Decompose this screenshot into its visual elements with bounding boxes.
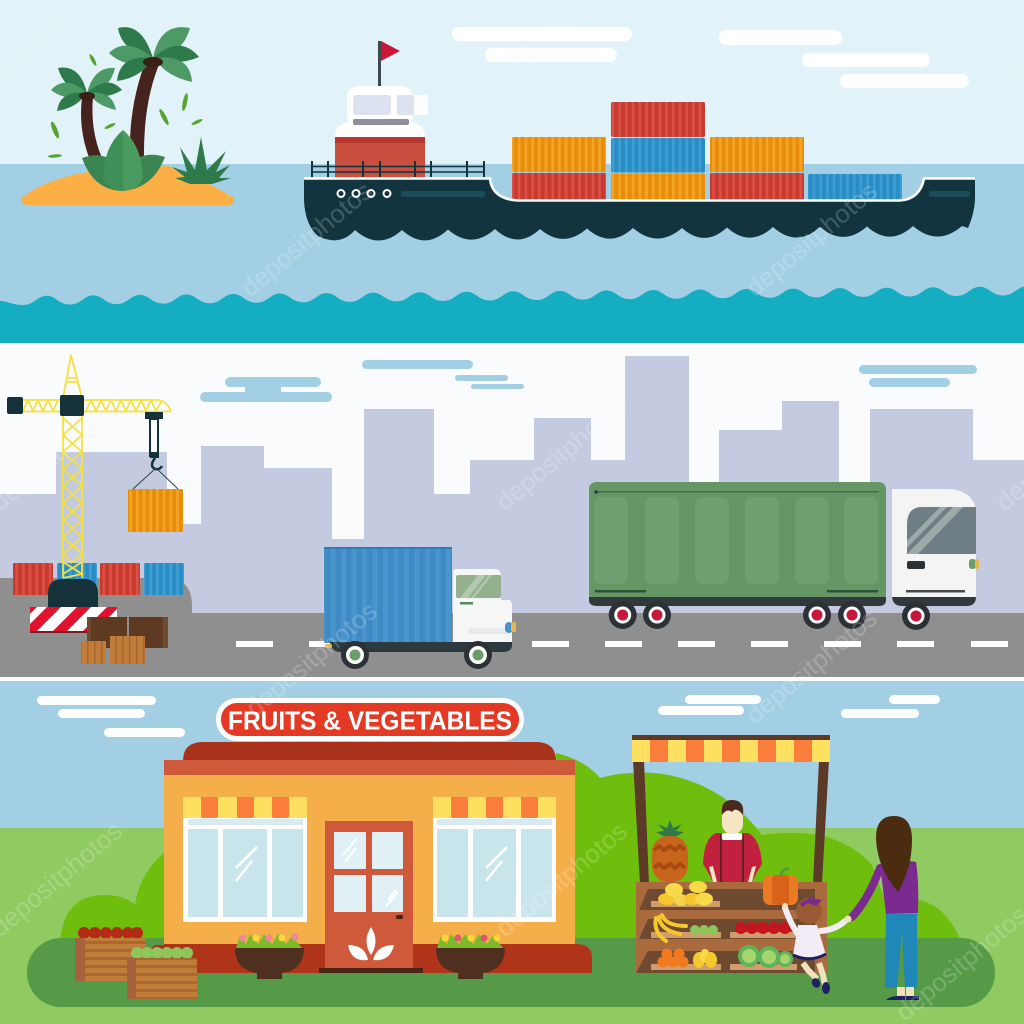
left flower pot [235, 934, 304, 979]
watermark: depositphotos [740, 603, 883, 730]
cab base [892, 597, 976, 606]
oranges [658, 948, 688, 968]
wall [164, 775, 575, 947]
market stall [632, 735, 830, 973]
rear light [325, 644, 332, 648]
barrier [30, 607, 117, 633]
lemons [658, 881, 713, 906]
vendor hands [709, 866, 756, 882]
counter [636, 882, 827, 973]
mast and jib lattice [20, 355, 171, 578]
door handle [460, 602, 473, 604]
arm [852, 868, 880, 917]
blue truck [324, 547, 516, 669]
sign text: FRUITS & VEGETABLES [228, 706, 512, 736]
palm trunks [81, 97, 102, 160]
crane [7, 355, 178, 578]
lamp [969, 559, 979, 569]
skyline [0, 356, 1024, 613]
trailer lines [594, 490, 879, 592]
crane base redraw over containers [63, 562, 82, 578]
red apples [78, 927, 143, 939]
hanging container [128, 489, 183, 532]
girl arms [785, 908, 845, 933]
path [27, 938, 995, 1007]
road [0, 613, 1024, 681]
watermark: depositphotos [490, 816, 633, 943]
girl legs [803, 963, 825, 985]
sand [22, 166, 234, 205]
panel: sea shipping [0, 0, 1024, 343]
right flower pot [436, 934, 505, 979]
cab [60, 395, 84, 416]
small palm fronds [51, 68, 122, 111]
windscreen [907, 507, 976, 554]
watermark: depositphotos [240, 596, 383, 723]
sky [0, 681, 1024, 829]
left window [183, 818, 307, 922]
awning [632, 735, 830, 762]
cargo box [324, 547, 452, 643]
door handle [907, 561, 925, 569]
containers [512, 102, 902, 201]
trailer [589, 482, 886, 602]
hair [876, 816, 912, 892]
green apple crate [127, 958, 197, 999]
deck line [304, 178, 975, 200]
trailer base [589, 597, 886, 606]
pumpkin [763, 868, 798, 905]
headlight [505, 622, 516, 633]
flag [378, 41, 400, 86]
clouds [200, 360, 977, 402]
vendor [703, 800, 762, 882]
cargo ship [304, 41, 975, 240]
crane base [48, 579, 98, 607]
railing [312, 161, 485, 177]
shoes [886, 996, 919, 1000]
roof [183, 742, 556, 761]
crates and boxes [81, 617, 168, 664]
clouds [452, 27, 969, 88]
panel: city logistics [0, 343, 1024, 681]
separator [0, 343, 1024, 346]
girl head [796, 898, 822, 924]
girl [782, 898, 845, 994]
hills [60, 753, 962, 945]
base [164, 944, 592, 973]
cab window [456, 575, 501, 598]
shelves [636, 889, 815, 973]
portholes [338, 190, 390, 197]
red apple crate [75, 938, 146, 981]
bush [82, 130, 165, 191]
pineapple [652, 820, 688, 882]
right window [433, 818, 556, 922]
watermark: depositphotos [235, 176, 378, 303]
torso [880, 860, 918, 914]
cab detail [469, 628, 507, 634]
green truck [589, 482, 979, 630]
sea [0, 164, 1024, 343]
door logo [348, 927, 394, 960]
cab [892, 489, 976, 597]
woman [844, 816, 919, 1000]
green apples on shelf [690, 925, 718, 935]
falling leaves [48, 53, 203, 158]
girl shoes [810, 977, 822, 989]
hook [133, 412, 178, 489]
ground containers [13, 563, 184, 595]
ship cabin [335, 86, 428, 178]
foreground wave [0, 286, 1024, 343]
big palm fronds [109, 27, 199, 82]
left awning [183, 797, 307, 818]
agave [172, 137, 231, 184]
cabbages [738, 945, 793, 968]
dock platform [0, 578, 192, 615]
wheels [609, 601, 930, 630]
hull stripes [401, 191, 970, 197]
counterweight [7, 397, 23, 414]
cornice [164, 760, 575, 775]
posts [633, 760, 829, 884]
chassis [330, 642, 512, 652]
red tomatoes [735, 922, 791, 934]
island with palms [22, 27, 234, 205]
door [319, 821, 423, 973]
vendor body [703, 833, 762, 882]
bananas [655, 915, 686, 941]
watermark: depositphotos [490, 390, 633, 517]
pears [693, 949, 717, 968]
girl dress [793, 925, 826, 958]
clouds [37, 695, 940, 737]
legs [885, 914, 917, 988]
wheels [341, 641, 492, 669]
ground [0, 828, 1024, 1024]
crates of apples [75, 927, 197, 999]
watermark: depositphotos [740, 176, 883, 303]
shelf boards [651, 901, 797, 970]
shop [164, 742, 592, 979]
shop sign [216, 698, 524, 741]
crate top red [152, 945, 192, 953]
background [0, 343, 1024, 613]
right awning [433, 797, 556, 818]
bumper line [906, 590, 965, 592]
cab [453, 569, 512, 642]
hull [304, 179, 975, 240]
trailer panels [594, 497, 878, 584]
green apples [131, 947, 193, 959]
vendor head [722, 806, 743, 834]
sky [0, 0, 1024, 164]
